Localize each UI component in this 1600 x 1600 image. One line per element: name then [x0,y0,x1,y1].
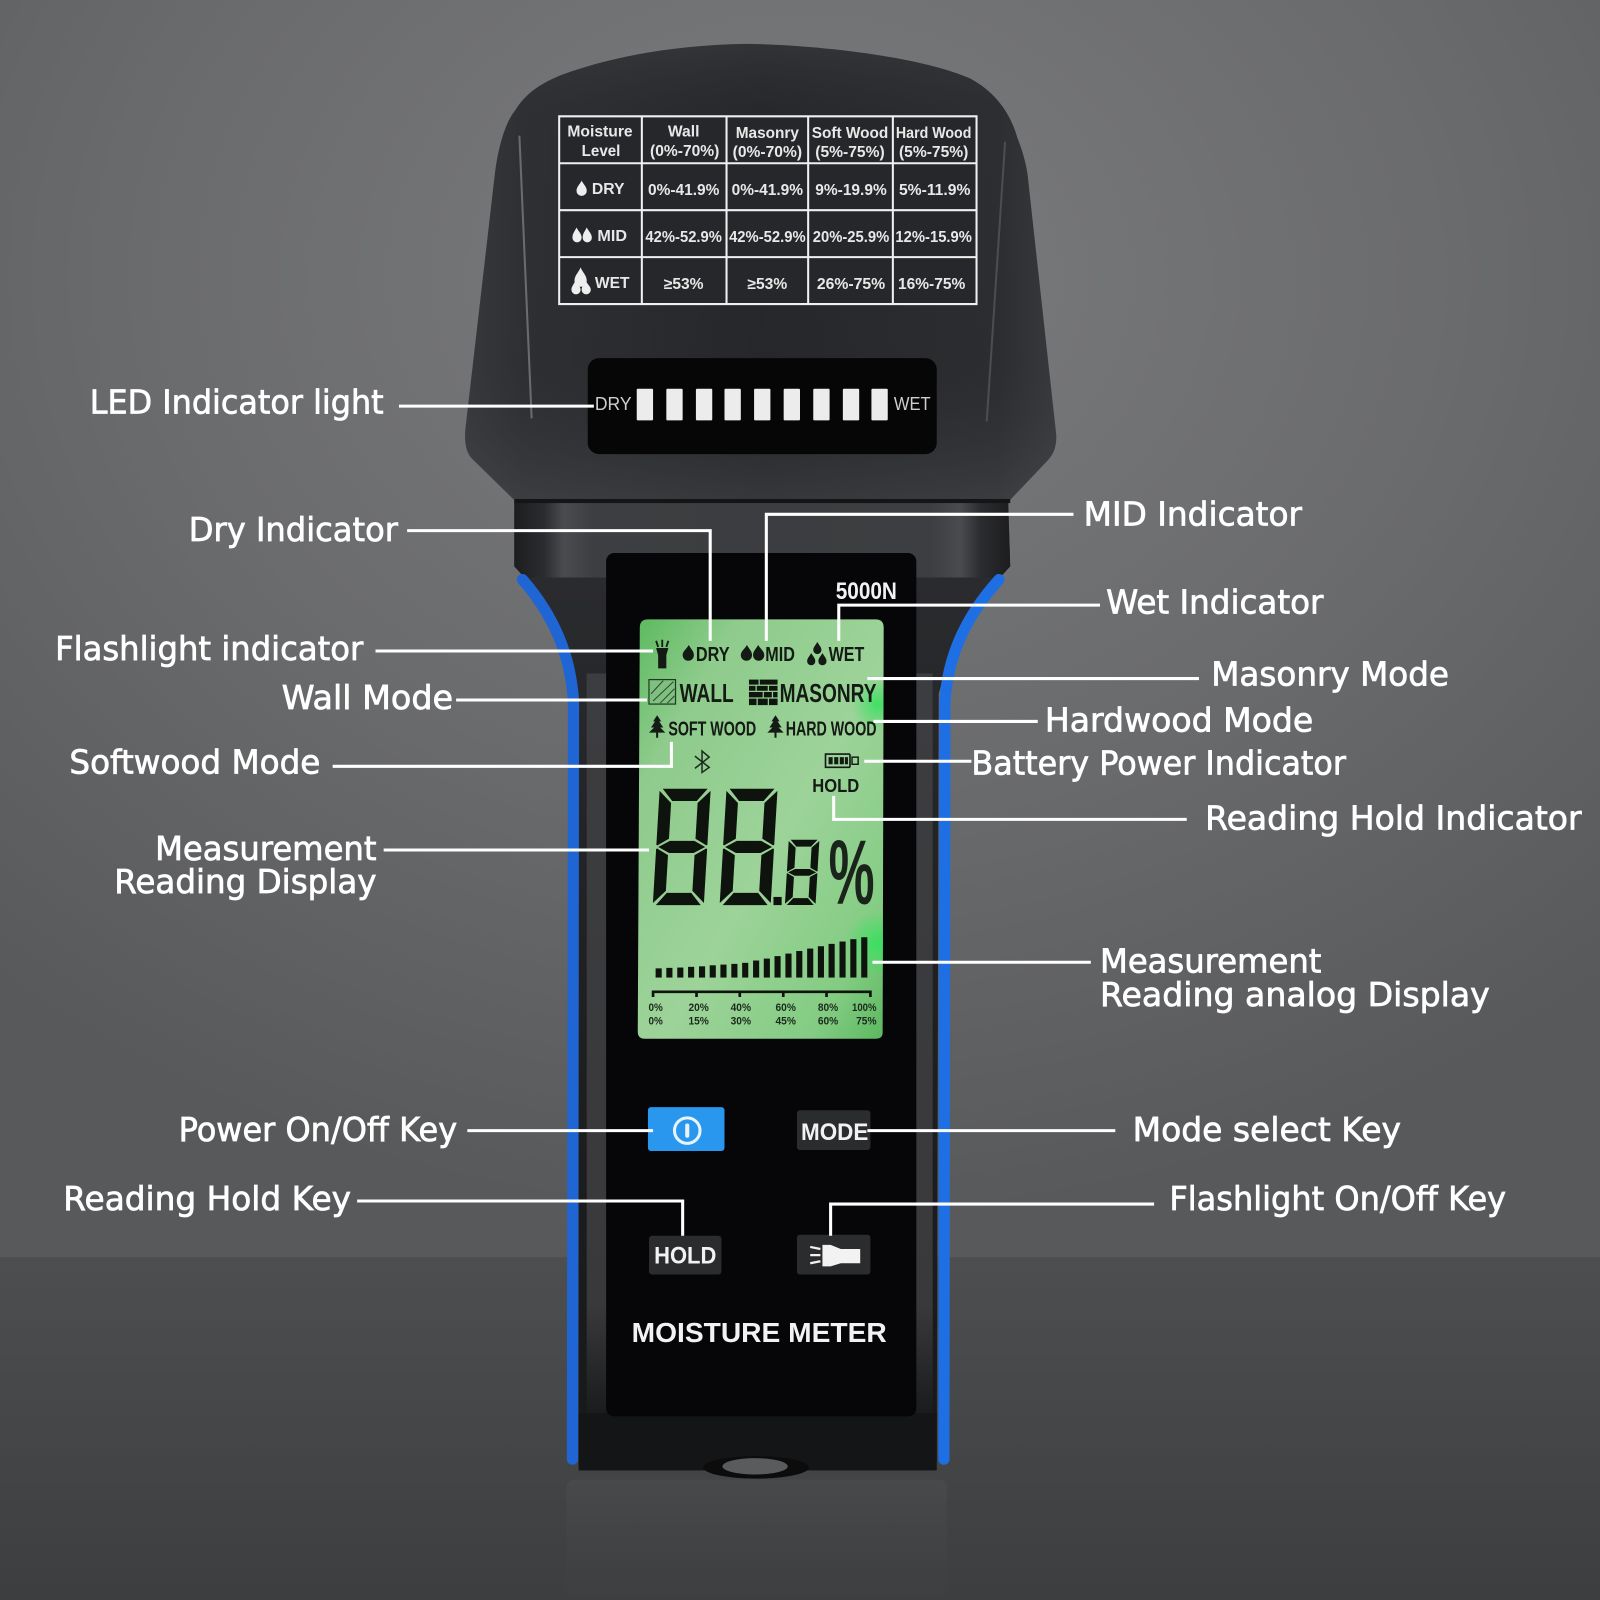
status: WET [807,642,865,666]
key: mode [797,1110,870,1150]
key: mode: MODE [801,1119,868,1146]
table header: (0%-70%) [650,143,719,160]
percent sign: % [829,822,874,924]
table row: DRY: 5%-11.9% [899,182,971,199]
status: DRY: DRY [696,644,730,666]
table row: MID: 20%-25.9% [813,229,890,246]
table row: MID [572,228,972,246]
scale labels: 0% [648,1015,663,1027]
callout: Reading Hold Indicator: Reading Hold Indicator [1205,800,1582,838]
icon: battery [826,754,858,767]
scale labels: 80% [818,1002,838,1014]
callout: Wall Mode: Wall Mode [282,679,453,717]
table row: WET: WET [595,275,630,292]
product name: MOISTURE METER [632,1317,887,1348]
table row: MID: 42%-52.9% [729,229,806,246]
table header: (0%-70%) [733,144,802,161]
table row: MID: MID [597,228,627,245]
head highlight left [519,136,532,418]
callout: Reading Hold Indicator [834,796,1582,838]
scale labels: 60% [776,1002,796,1014]
table row: WET [571,267,966,294]
callout: Mode select Key: Mode select Key [1133,1111,1401,1149]
LCD screen [638,619,910,1039]
key: hold: HOLD [654,1242,716,1269]
front panel [606,553,916,1416]
callout: Flashlight On/Off Key [831,1180,1506,1236]
panel: LED indicator strip [588,358,937,454]
blue grip right [944,580,999,1459]
callout: Masonry Mode: Masonry Mode [1211,656,1449,694]
table row: WET: ≥53% [664,276,704,293]
callout: Reading Hold Key [63,1180,683,1236]
neck seam [514,499,1010,503]
table row: DRY: 9%-19.9% [815,182,887,199]
callout: Softwood Mode [69,742,671,781]
callout: MID Indicator: MID Indicator [1084,496,1303,534]
icon: flashlight [656,640,668,668]
device body [514,501,1010,1470]
table row: DRY: 0%-41.9% [648,182,720,199]
head of meter [465,44,1056,503]
scale labels [648,1002,877,1027]
table header [567,124,971,161]
table row: WET: 16%-75% [898,276,966,293]
table header: (5%-75%) [899,144,968,161]
side band left [587,673,607,1416]
status: MID: MID [765,644,795,666]
table header: Masonry [736,125,799,142]
callout: Measurement Reading analog Display [872,942,1490,1014]
callout: Measurement Reading analog Display: Measurement [1100,942,1322,980]
callout: Dry Indicator: Dry Indicator [189,511,399,549]
mode: wall [649,680,734,708]
callout: Battery Power Indicator: Battery Power Indicator [971,744,1346,782]
scale labels: 45% [776,1015,796,1027]
callout: Power On/Off Key: Power On/Off Key [179,1111,457,1149]
callout: MID Indicator [766,496,1303,641]
callout: Wet Indicator: Wet Indicator [1106,583,1324,621]
key: hold [649,1236,721,1274]
device reflection [566,1480,947,1600]
table header: Wall [668,124,699,141]
table row: MID: 42%-52.9% [645,229,722,246]
panel: LED indicator strip: DRY [595,393,632,414]
scale labels: 20% [688,1002,709,1014]
icon: bluetooth [695,751,709,772]
scale labels: 75% [856,1015,877,1027]
callout: Measurement Reading Display: Measurement [155,830,377,868]
head highlight right [987,142,1005,421]
scale labels: 15% [688,1015,709,1027]
scale labels: 60% [818,1015,838,1027]
scale labels: 100% [852,1002,877,1014]
status: WET: WET [829,644,865,666]
status: MID [741,644,795,666]
key: flashlight [797,1235,870,1274]
table header: Moisture [567,124,633,141]
side band right [915,673,933,1416]
callout: Flashlight indicator: Flashlight indicator [55,630,364,668]
head shading [465,44,1056,503]
panel: moisture table [559,116,977,304]
callout: Wet Indicator [839,583,1324,641]
callout: Flashlight On/Off Key: Flashlight On/Off Key [1169,1180,1506,1218]
mode: hardwood: HARD WOOD [786,719,877,741]
callout: Measurement Reading Display [114,830,649,901]
blue grip left [522,580,573,1459]
base notch [703,1456,809,1479]
callout: Softwood Mode: Softwood Mode [69,743,320,781]
scale labels: 0% [648,1002,663,1014]
callout: LED Indicator light: LED Indicator light [90,383,384,421]
body bottom shadow [579,1413,937,1470]
callout: Measurement Reading analog Display: Reading analog Display [1100,976,1490,1014]
digit readout: 88.8 [653,806,816,920]
device: moisture meter [465,44,1056,1479]
table row: WET: ≥53% [747,276,788,293]
scale labels: 30% [731,1015,751,1027]
analog scale axis [653,992,870,997]
mode: masonry: MASONRY [780,680,877,708]
table header: Hard Wood [896,125,971,142]
status: DRY [683,644,730,666]
table header: Soft Wood [812,125,888,142]
key: power [648,1107,724,1151]
table row: DRY [577,181,971,199]
mode: softwood: SOFT WOOD [668,719,756,741]
callout: Hardwood Mode: Hardwood Mode [1045,702,1313,740]
table header: Level [582,143,620,160]
mode: softwood [649,715,756,741]
callout: Dry Indicator [189,511,710,641]
mode: masonry [749,680,877,708]
table header: (5%-75%) [815,144,885,161]
table row: MID: 12%-15.9% [895,229,972,246]
callout: Measurement Reading Display: Reading Display [114,863,377,901]
mode: hardwood [767,715,877,741]
neck band [514,501,1010,578]
background floor [0,1257,1600,1600]
analog bar graph [656,937,867,978]
table row: WET: 26%-75% [817,276,886,293]
mode: wall: WALL [680,680,734,708]
panel: LED indicator strip: WET [894,393,931,414]
table row: DRY: 0%-41.9% [732,182,803,199]
callout: Reading Hold Key: Reading Hold Key [63,1180,351,1218]
background wall [0,0,1600,1258]
model number: 5000N [836,578,897,605]
table row: DRY: DRY [592,181,624,198]
scale labels: 40% [731,1002,751,1014]
status: HOLD: HOLD [812,775,859,796]
